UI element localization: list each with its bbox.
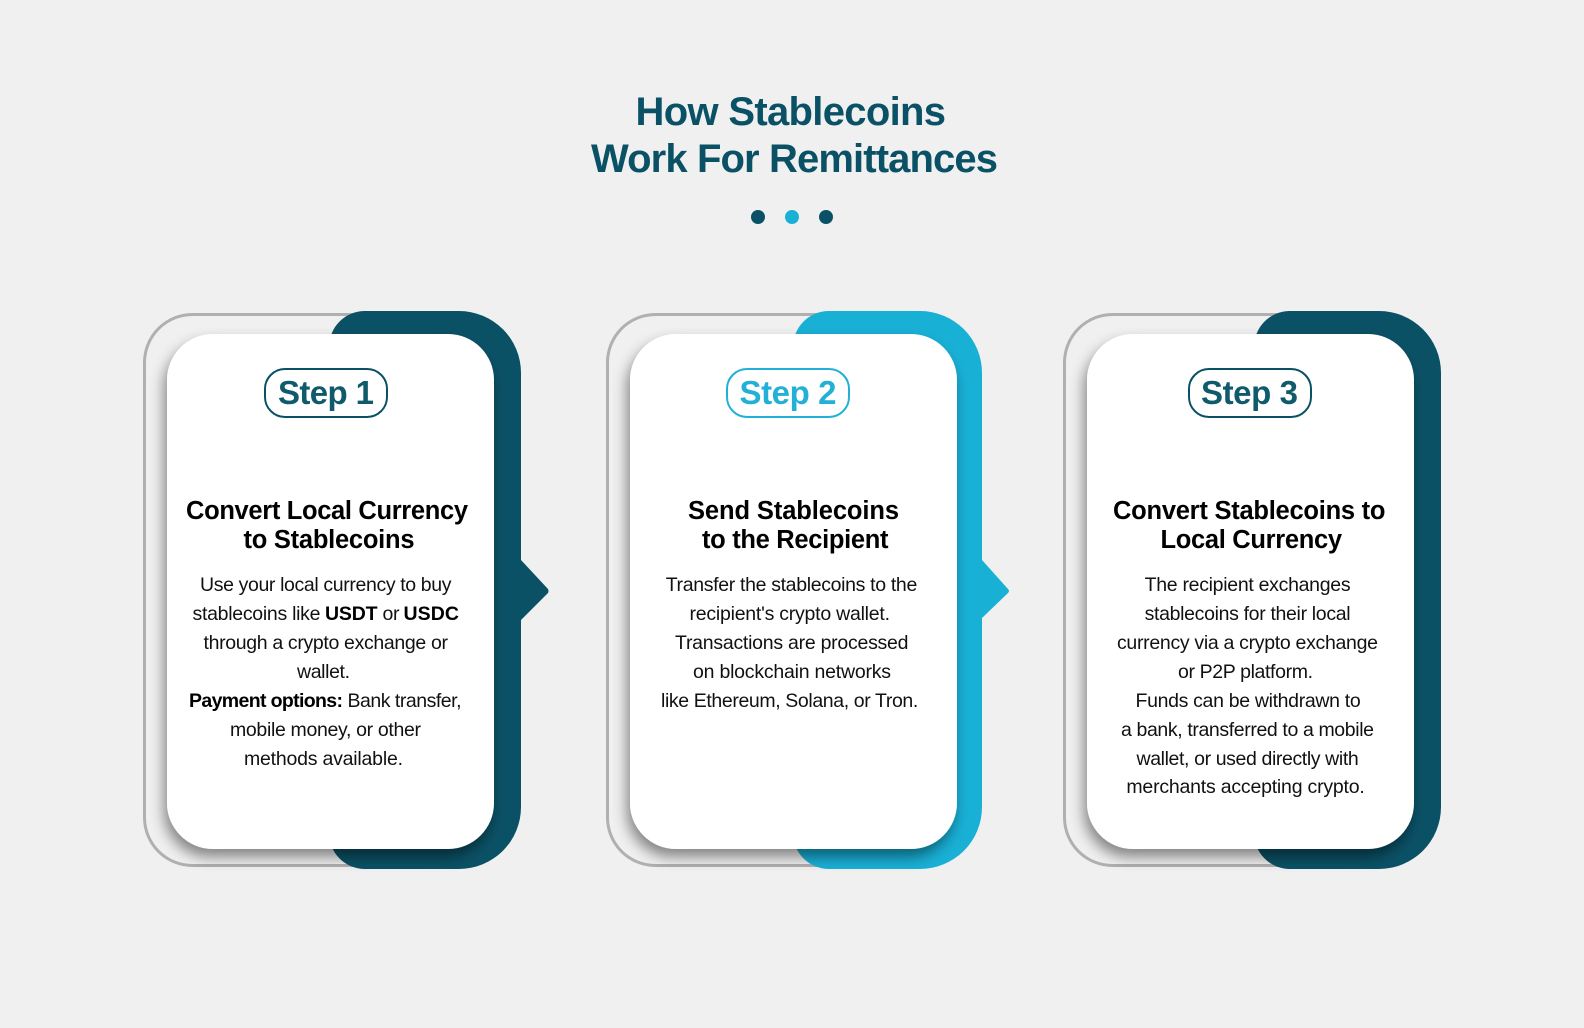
- description: [189, 574, 462, 770]
- description: Bank transfer,: [348, 690, 462, 712]
- heading: [186, 497, 469, 554]
- description: The recipient exchanges: [1145, 574, 1351, 596]
- dots: [751, 210, 833, 224]
- description: on blockchain networks: [693, 661, 891, 683]
- coloured backing with arrow: [793, 311, 1009, 869]
- step badge: Step 1: [278, 374, 374, 411]
- description: methods available.: [244, 748, 403, 770]
- white card: [630, 334, 957, 849]
- description: USDT: [325, 603, 378, 625]
- heading: Send Stablecoins: [688, 497, 899, 525]
- description: Transfer the stablecoins to the: [666, 574, 917, 596]
- description: [661, 574, 918, 712]
- description: currency via a crypto exchange: [1117, 632, 1378, 654]
- step badge: [1189, 369, 1311, 417]
- step badge: Step 2: [740, 374, 836, 411]
- white card: [1087, 334, 1414, 849]
- description: Funds can be withdrawn to: [1136, 690, 1361, 712]
- description: merchants accepting crypto.: [1126, 776, 1365, 798]
- heading: Local Currency: [1160, 526, 1343, 554]
- coloured backing with arrow: [329, 311, 548, 869]
- card outline: [1064, 314, 1384, 866]
- step badge: [265, 369, 387, 417]
- panel: step 1: [144, 311, 548, 869]
- description: [1117, 574, 1378, 798]
- heading: [1113, 497, 1386, 554]
- description: USDC: [404, 603, 459, 625]
- description: Use your local currency to buy: [200, 574, 452, 596]
- description: stablecoins like: [192, 603, 320, 625]
- description: Transactions are processed: [675, 632, 908, 654]
- step badge: [727, 369, 849, 417]
- heading: to the Recipient: [702, 526, 889, 554]
- heading: Convert Stablecoins to: [1113, 497, 1386, 525]
- description: a bank, transferred to a mobile: [1121, 719, 1374, 741]
- heading: [688, 497, 899, 554]
- card outline: [144, 314, 464, 866]
- description: like Ethereum, Solana, or Tron.: [661, 690, 918, 712]
- panel: step 2: [608, 311, 1009, 869]
- step badge: Step 3: [1201, 374, 1298, 411]
- description: recipient's crypto wallet.: [690, 603, 890, 625]
- description: wallet.: [296, 661, 350, 683]
- description: or P2P platform.: [1178, 661, 1313, 683]
- white card: [167, 334, 494, 849]
- description: wallet, or used directly with: [1136, 748, 1359, 770]
- description: Payment options:: [189, 690, 343, 712]
- title: How Stablecoins: [636, 90, 946, 134]
- description: stablecoins for their local: [1145, 603, 1351, 625]
- description: through a crypto exchange or: [204, 632, 448, 654]
- description: mobile money, or other: [230, 719, 422, 741]
- title: [591, 90, 998, 181]
- heading: to Stablecoins: [244, 526, 414, 554]
- description: or: [382, 603, 400, 625]
- heading: Convert Local Currency: [186, 497, 469, 525]
- coloured backing: [1254, 311, 1441, 869]
- title: Work For Remittances: [591, 137, 998, 181]
- card outline: [608, 314, 928, 866]
- panel: step 3: [1064, 311, 1441, 869]
